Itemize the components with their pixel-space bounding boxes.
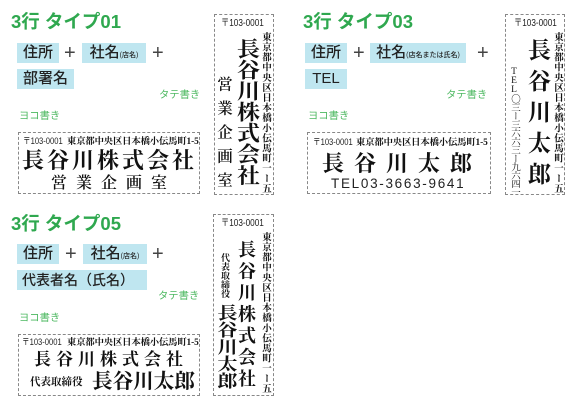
title role: 代表取締役 — [220, 253, 230, 298]
company name: 長谷川株式会社 — [22, 148, 197, 173]
chip: company — [83, 244, 147, 264]
vertical label: タテ書き — [446, 90, 487, 101]
stamp: horizontal — [18, 132, 200, 194]
stamp: vertical — [213, 214, 274, 396]
chip: TEL — [305, 69, 347, 89]
person name: 長谷川太郎 — [525, 38, 550, 193]
title: 3行 タイプ03 — [303, 11, 413, 32]
stamp: vertical — [214, 14, 274, 195]
title: 3行 タイプ05 — [11, 213, 121, 234]
chip: company — [82, 43, 146, 63]
department: 営業企画室 — [51, 175, 176, 192]
plus: + — [64, 42, 76, 64]
panel: type 01 — [11, 11, 274, 196]
chip: address — [17, 244, 59, 264]
chip: department: 部署名 — [23, 70, 68, 87]
chip: company: 社名(店名または氏名) — [376, 44, 460, 61]
address: 東京都中央区日本橋小伝馬町1-5 — [356, 138, 488, 148]
stamp: horizontal — [307, 132, 491, 194]
address: 東京都中央区日本橋小伝馬町一ー五 — [552, 32, 562, 194]
postal code: 〒103-0001 — [221, 18, 264, 29]
person name: 長谷川太郎 — [214, 304, 236, 389]
plus: + — [477, 42, 489, 64]
plus: + — [152, 42, 164, 64]
chip: representative: 代表者名（氏名） — [22, 272, 134, 288]
postal code: 〒103-0001 — [514, 18, 557, 29]
vertical label: タテ書き — [158, 291, 199, 302]
department: 営業企画室 — [215, 76, 232, 196]
plus: + — [152, 243, 164, 265]
chip: address: 住所 — [23, 44, 53, 61]
address: 東京都中央区日本橋小伝馬町1-5 — [67, 338, 199, 348]
horizontal label: ヨコ書き — [19, 111, 60, 122]
postal code: 〒103-0001 — [313, 137, 353, 148]
vertical label: タテ書き — [159, 90, 200, 101]
person name: 長谷川太郎 — [322, 151, 482, 176]
address: 東京都中央区日本橋小伝馬町一ー五 — [260, 232, 270, 394]
chip: address: 住所 — [311, 44, 341, 61]
plus: + — [65, 243, 77, 265]
horizontal label: ヨコ書き — [19, 313, 60, 324]
postal code: 〒103-0001 — [221, 218, 264, 229]
telephone: TEL〇三ー三六六三ー九六四一 — [509, 67, 519, 196]
person name: 長谷川太郎 — [92, 371, 195, 393]
chip: representative — [17, 270, 147, 290]
chip: department — [17, 69, 74, 89]
stamp: vertical — [505, 14, 565, 195]
chip: address — [305, 43, 347, 63]
title: 3行 タイプ01 — [11, 11, 121, 32]
panel: type 03 — [303, 11, 565, 196]
panel: type 05 — [11, 213, 274, 396]
address: 東京都中央区日本橋小伝馬町1-5 — [67, 137, 199, 147]
plus: + — [353, 42, 365, 64]
stamp: horizontal — [18, 334, 200, 396]
postal code: 〒103-0001 — [22, 337, 62, 348]
telephone: TEL03-3663-9641 — [331, 176, 465, 191]
company name: 長谷川株式会社 — [234, 38, 259, 185]
company name: 長谷川株式会社 — [236, 240, 256, 390]
chip: company: 社名(店名) — [90, 44, 138, 61]
title role: 代表取締役 — [30, 377, 82, 388]
chip: address: 住所 — [23, 245, 53, 262]
chip: address — [17, 43, 59, 63]
horizontal label: ヨコ書き — [308, 111, 349, 122]
postal code: 〒103-0001 — [23, 136, 63, 147]
address: 東京都中央区日本橋小伝馬町一ー五 — [260, 32, 270, 194]
company name: 長谷川株式会社 — [34, 350, 188, 369]
chip: TEL: TEL — [312, 70, 340, 87]
chip: company: 社名(店名) — [91, 245, 139, 262]
